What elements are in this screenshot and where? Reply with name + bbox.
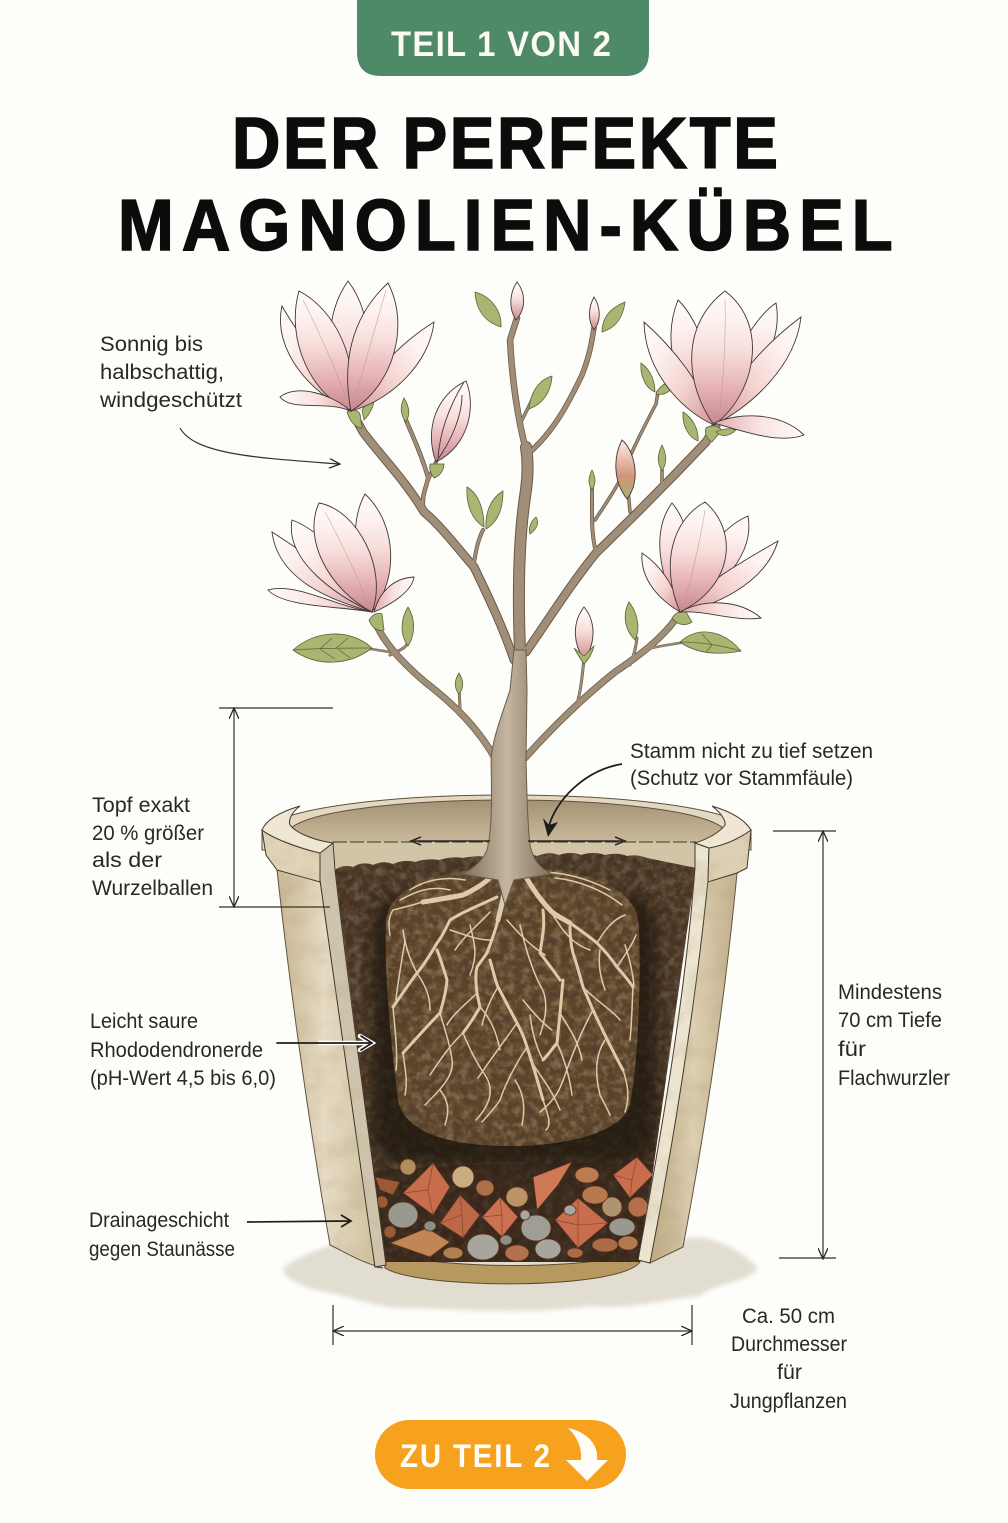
label: depth with dimension [773,831,950,1258]
watercolour wash on pot [255,825,755,1270]
rim left [262,830,320,882]
label: soil: Rhododendronerde [90,1038,263,1062]
label: pot size with dimension: Topf exakt [92,793,190,817]
dimension arrow: height [219,708,333,907]
label: trunk depth: Stamm nicht zu tief setzen [630,739,873,763]
title: DER PERFEKTE [232,103,778,184]
label: diameter with dimension [333,1304,847,1413]
pot back rim and inner wall [262,795,751,850]
header tag: Teil 1 von 2: TEIL 1 VON 2 [391,25,611,64]
trunk [462,650,552,905]
label: sun location: Sonnig bis [100,332,203,356]
flower: lower left [268,494,414,612]
flower: lower right [642,502,778,619]
button: Zu Teil 2: ZU TEIL 2 [400,1438,550,1474]
label: depth with dimension: Mindestens [838,980,942,1004]
button: Zu Teil 2 [375,1420,626,1489]
arrow: to soil line [543,764,622,837]
pot outer left wall [277,870,383,1268]
branches [352,318,716,762]
label: depth with dimension: Flachwurzler [838,1066,950,1090]
title: MAGNOLIEN-KÜBEL [118,185,893,266]
label: pot size with dimension: Wurzelballen [92,876,213,900]
leaves and buds [293,282,741,694]
arrow: rim gap [411,837,625,845]
label: trunk depth [411,739,873,845]
label: soil: (pH-Wert 4,5 bis 6,0) [90,1066,276,1090]
arrow: to drainage [247,1215,351,1227]
label: pot size with dimension: 20 % größer [92,821,204,845]
dimension arrow: width [333,1305,692,1345]
label: sun location: windgeschützt [99,388,242,412]
label: depth with dimension: für [838,1037,866,1061]
label: diameter with dimension: Durchmesser [731,1332,847,1356]
label: drainage [89,1208,351,1261]
label: sun location [99,332,339,464]
soil [330,850,700,1270]
header tag: Teil 1 von 2 [357,0,649,76]
arrow: to soil [277,1036,372,1050]
ground shadow [282,1238,758,1311]
flower: top right [644,291,804,438]
title [118,103,893,266]
label: diameter with dimension: Jungpflanzen [730,1389,847,1413]
label: trunk depth: (Schutz vor Stammfäule) [630,766,853,790]
cut wall left [320,843,386,1267]
rim right [708,830,751,882]
icon: curved arrow down [566,1428,608,1481]
cut wall right [638,843,709,1263]
label: soil: Leicht saure [90,1009,198,1033]
label: pot size with dimension [92,708,333,907]
illustration: magnolia tree [268,281,804,762]
label: pot size with dimension: als der [92,848,162,872]
buds [431,381,470,462]
arrow: to crown [180,428,339,464]
label: diameter with dimension: Ca. 50 cm [742,1304,835,1328]
label: sun location: halbschattig, [100,360,224,384]
label: drainage: Drainageschicht [89,1208,229,1232]
illustration: cut-away pot [255,650,758,1311]
label: depth with dimension: 70 cm Tiefe [838,1008,942,1032]
drainage layer [366,1157,660,1262]
pot outer right wall [650,873,737,1263]
dimension arrow: depth [773,831,836,1258]
label: diameter with dimension: für [777,1360,802,1384]
flower: top left [280,281,434,411]
label: soil [90,1009,372,1090]
label: drainage: gegen Staunässe [89,1237,235,1261]
saucer [383,1252,640,1284]
roots [389,870,636,1130]
root ball [380,862,645,1152]
